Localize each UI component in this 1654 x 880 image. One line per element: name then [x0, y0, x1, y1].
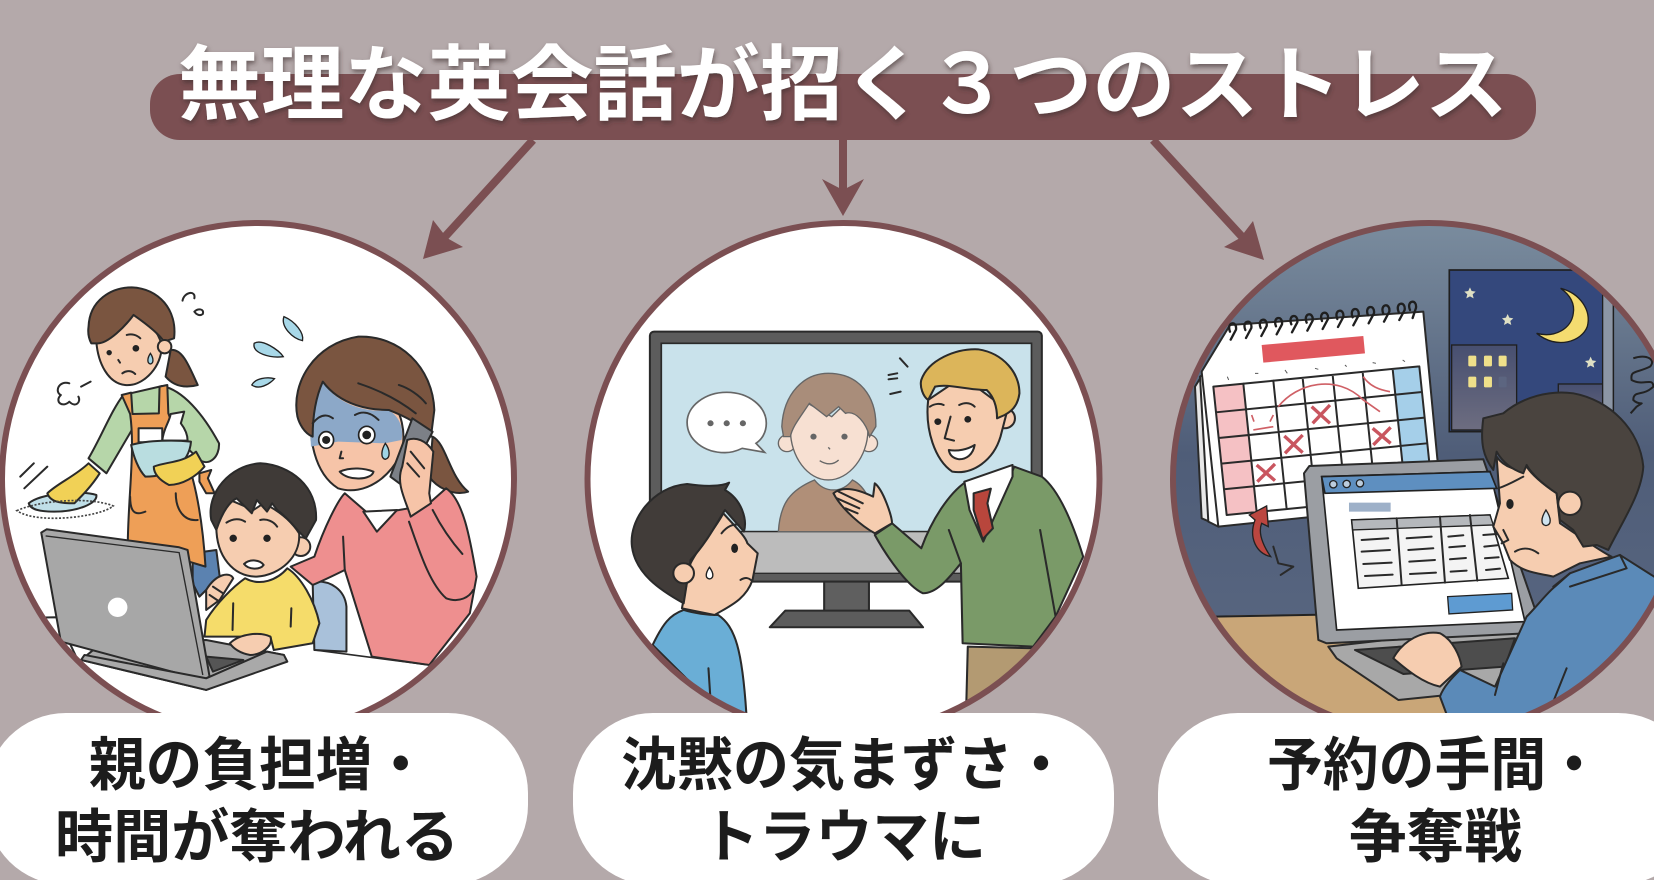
table front edge	[210, 654, 428, 690]
title: 無理な英会話が招く３つのストレス	[178, 40, 1508, 131]
motion marks	[889, 358, 908, 394]
arrow: title to right circle	[1153, 140, 1264, 260]
arrow: title to centre circle	[822, 140, 864, 216]
title bar	[150, 74, 1536, 140]
man	[1440, 555, 1654, 723]
stress scribble	[1631, 357, 1653, 413]
left woman	[166, 350, 198, 387]
boy	[204, 568, 319, 650]
label pill: booking: 予約の手間・	[1267, 733, 1602, 798]
sweat drops	[283, 317, 303, 341]
desk	[1216, 614, 1445, 713]
calendar	[1194, 378, 1208, 522]
label pill: parent burden	[0, 713, 528, 880]
red arrow	[1249, 506, 1271, 557]
label pill: silence: トラウマに	[702, 805, 986, 870]
laptop	[81, 640, 287, 690]
panel: parent burden circle	[0, 223, 514, 735]
window	[1449, 270, 1613, 432]
teacher	[875, 467, 1083, 647]
monitor	[650, 332, 1042, 582]
label pill: silence	[573, 713, 1114, 880]
speech bubble	[687, 392, 766, 453]
label pill: booking	[1158, 713, 1654, 880]
person on screen	[778, 480, 877, 532]
boy	[653, 610, 746, 713]
illustration: night booking scene	[1195, 270, 1654, 743]
right woman back & chair	[313, 581, 346, 652]
illustration: video lesson scene	[632, 332, 1083, 713]
panel: booking circle	[1173, 223, 1654, 743]
laptop	[1327, 634, 1518, 701]
mother face	[311, 380, 403, 490]
label pill: parent burden: 親の負担増・	[89, 733, 429, 798]
illustration: family scene	[0, 287, 477, 713]
arrow: title to left circle	[423, 140, 533, 259]
panel: silence circle	[588, 223, 1100, 735]
label pill: parent burden: 時間が奪われる	[55, 805, 459, 870]
label pill: booking: 争奪戦	[1349, 805, 1522, 870]
schedule table	[1352, 515, 1508, 588]
label pill: silence: 沈黙の気まずさ・	[621, 733, 1069, 798]
